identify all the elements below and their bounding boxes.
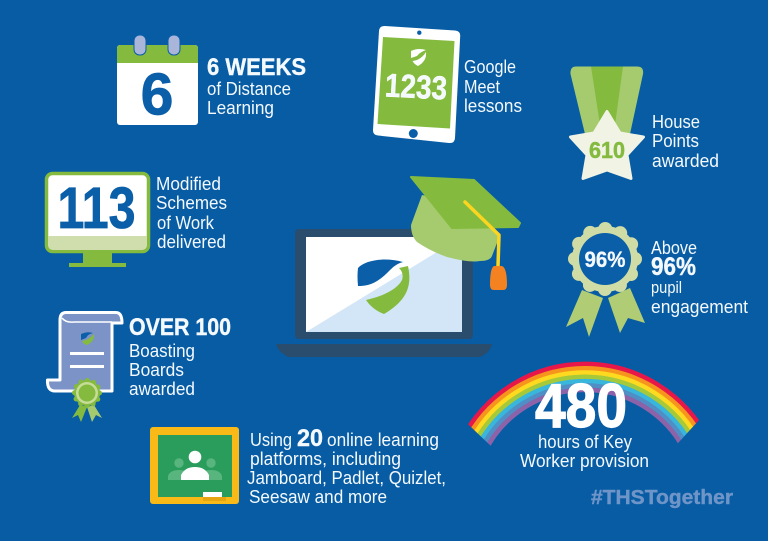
text: above 96% pupil engagement: engagement — [651, 297, 748, 317]
text: Google Meet lessons: lessons — [464, 96, 522, 116]
text: boasting boards awarded — [129, 341, 195, 399]
text: above 96% pupil engagement: Above — [651, 238, 697, 258]
text: using 20 online learning platforms — [247, 425, 446, 507]
text: modified schemes of work delivered: Schemes — [156, 193, 227, 213]
text: using 20 online learning platforms: platforms, including — [250, 449, 401, 469]
panel: pupil engagement — [566, 226, 748, 337]
text: boasting boards awarded: Boards — [129, 360, 184, 380]
text: house points awarded — [652, 112, 719, 171]
icon: rainbow — [468, 362, 699, 446]
text: above 96% pupil engagement: pupil — [651, 278, 682, 297]
hashtag: #THSTogether — [591, 487, 733, 509]
icon: monitor: 113 — [58, 176, 136, 241]
icon: tablet: 1233 — [384, 66, 448, 107]
panel: Google Meet lessons — [373, 26, 522, 143]
text: hours of key worker provision — [520, 432, 649, 471]
icon: rosette — [566, 226, 645, 337]
text: using 20 online learning platforms: Using — [250, 430, 292, 450]
text: using 20 online learning platforms: Seesaw and more — [249, 487, 387, 507]
panel: key worker hours — [461, 364, 709, 471]
icon: star medal: 610 — [589, 137, 625, 163]
text: over 100: OVER 100 — [129, 314, 231, 341]
text: using 20 online learning platforms: online learning — [327, 430, 439, 450]
text: above 96% pupil engagement: 96% — [651, 253, 696, 281]
icon: rosette: 96% — [584, 247, 626, 272]
panel: house points — [570, 66, 719, 178]
panel: 6 weeks of distance learning — [117, 35, 306, 128]
panel: online learning platforms — [150, 425, 446, 507]
text: above 96% pupil engagement — [651, 238, 748, 317]
text: using 20 online learning platforms: 20 — [297, 425, 323, 452]
text: 480: 480 — [535, 372, 627, 441]
text: using 20 online learning platforms: Jamboard, Padlet, Quizlet, — [247, 468, 446, 488]
icon: monitor — [46, 174, 148, 267]
text: modified schemes of work delivered — [156, 174, 227, 252]
text: Google Meet lessons: Google — [464, 57, 516, 77]
panel: boasting boards — [47, 312, 231, 422]
icon: Google Classroom — [150, 427, 239, 504]
text: 6 weeks: 6 WEEKS — [207, 54, 306, 81]
text: of distance learning — [207, 79, 291, 118]
icon: graduation cap — [411, 177, 520, 290]
text: boasting boards awarded: Boasting — [129, 341, 195, 361]
icon: laptop — [276, 229, 492, 357]
text: hours of key worker provision: Worker provision — [520, 451, 649, 471]
text: of distance learning: of Distance — [207, 79, 291, 99]
icon: certificate scroll — [47, 312, 122, 422]
text: house points awarded: awarded — [652, 151, 719, 171]
icon: star medal — [570, 66, 644, 178]
icon: calendar — [117, 35, 198, 128]
text: boasting boards awarded: awarded — [129, 379, 195, 399]
text: house points awarded: Points — [652, 131, 699, 151]
text: modified schemes of work delivered: of Work — [157, 213, 215, 233]
text: hours of key worker provision: hours of Key — [538, 432, 632, 452]
icon: tablet — [373, 26, 460, 143]
text: Google Meet lessons — [464, 57, 522, 116]
text: modified schemes of work delivered: delivered — [157, 232, 226, 252]
illustration: laptop with graduation cap — [276, 177, 520, 357]
icon: shield logo — [358, 260, 409, 314]
panel: modified schemes of work — [46, 174, 227, 267]
text: Google Meet lessons: Meet — [464, 77, 500, 97]
text: modified schemes of work delivered: Modified — [156, 174, 221, 194]
text: house points awarded: House — [652, 112, 700, 132]
text: of distance learning: Learning — [207, 98, 274, 118]
icon: calendar: 6 — [141, 62, 173, 128]
